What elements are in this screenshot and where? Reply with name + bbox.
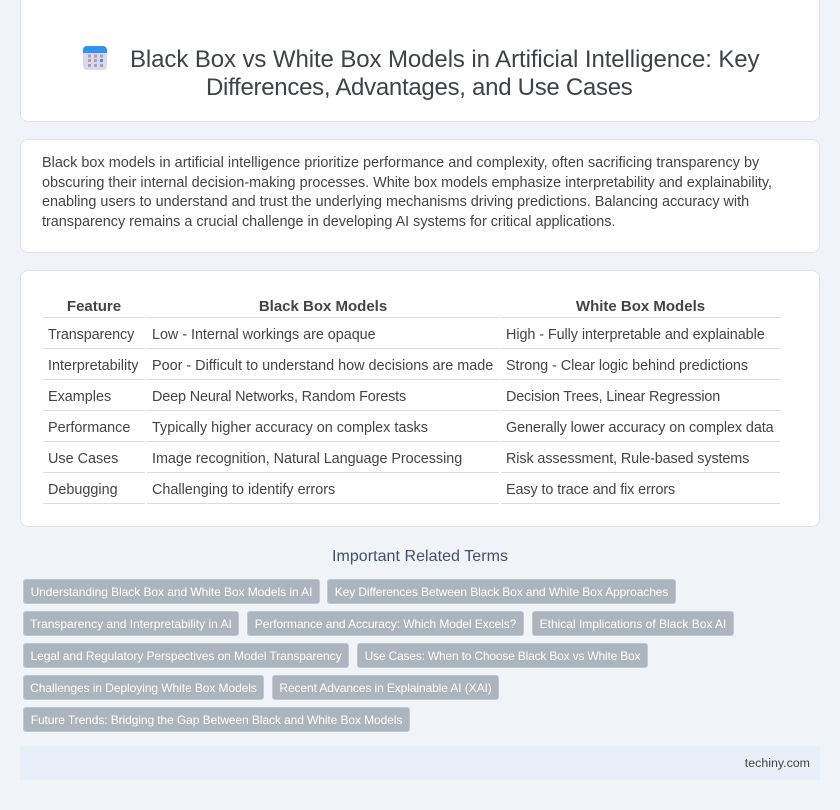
tag: Future Trends: Bridging the Gap Between Black and White Box Models <box>31 713 402 727</box>
tag <box>272 675 499 700</box>
row: examples: Decision Trees, Linear Regression <box>506 389 720 405</box>
row: examples <box>48 389 720 405</box>
summary text: obscuring their internal decision-making processes. White box models emphasize interpretability and explainability, <box>42 175 772 191</box>
tag: Legal and Regulatory Perspectives on Model Transparency <box>30 649 342 663</box>
panel: comparison table card <box>20 270 820 527</box>
table header: White Box Models <box>576 298 705 315</box>
tag: Key Differences Between Black Box and White Box Approaches <box>335 585 668 599</box>
table header: Black Box Models <box>259 298 387 315</box>
tag: Performance and Accuracy: Which Model Excels? <box>255 617 516 631</box>
row: interpretability <box>48 358 748 374</box>
summary text: transparency remains a crucial challenge in developing AI systems for critical applications. <box>42 214 616 230</box>
row: examples: Deep Neural Networks, Random Forests <box>152 389 406 405</box>
row: debugging: Challenging to identify errors <box>152 482 335 498</box>
table header <box>67 298 705 315</box>
row: performance: Generally lower accuracy on complex data <box>506 420 774 436</box>
footer site name: techiny.com <box>745 756 810 770</box>
row: transparency: Transparency <box>48 327 134 343</box>
row: use cases <box>48 451 749 467</box>
related term tags <box>23 579 734 732</box>
row: transparency <box>48 327 765 343</box>
icon: calendar grid <box>83 46 107 70</box>
tag: Challenges in Deploying White Box Models <box>30 681 257 695</box>
row: debugging: Easy to trace and fix errors <box>506 482 675 498</box>
row: use cases: Risk assessment, Rule-based systems <box>506 451 749 467</box>
footer bar <box>20 746 820 780</box>
heading: related terms: Important Related Terms <box>332 548 508 565</box>
summary text <box>42 155 772 230</box>
tag <box>23 707 410 732</box>
tag: Transparency and Interpretability in AI <box>30 617 232 631</box>
row: use cases: Image recognition, Natural Language Processing <box>152 451 462 467</box>
tag: Ethical Implications of Black Box AI <box>540 617 726 631</box>
tag <box>23 579 320 604</box>
row: debugging <box>48 482 675 498</box>
row: use cases: Use Cases <box>48 451 118 467</box>
tag <box>23 611 239 636</box>
tag <box>532 611 734 636</box>
row: transparency: Low - Internal workings are opaque <box>152 327 376 343</box>
panel: title card <box>20 0 820 122</box>
row: interpretability: Interpretability <box>48 358 138 374</box>
tag <box>247 611 524 636</box>
title <box>130 46 760 101</box>
comparison table <box>43 298 780 504</box>
row: performance: Performance <box>48 420 130 436</box>
panel: summary card <box>20 139 820 253</box>
row: performance <box>48 420 774 436</box>
row: examples: Examples <box>48 389 111 405</box>
tag <box>357 643 648 668</box>
row: debugging: Debugging <box>48 482 118 498</box>
title: Differences, Advantages, and Use Cases <box>206 74 633 101</box>
title: Black Box vs White Box Models in Artificial Intelligence: Key <box>130 46 759 73</box>
tag: Use Cases: When to Choose Black Box vs White Box <box>365 649 640 663</box>
row: performance: Typically higher accuracy on complex tasks <box>152 420 428 436</box>
row: interpretability: Poor - Difficult to understand how decisions are made <box>152 358 493 374</box>
row: interpretability: Strong - Clear logic behind predictions <box>506 358 748 374</box>
table header: Feature <box>67 298 121 315</box>
row: transparency: High - Fully interpretable and explainable <box>506 327 765 343</box>
tag <box>23 643 349 668</box>
tag: Recent Advances in Explainable AI (XAI) <box>279 681 492 695</box>
summary text: Black box models in artificial intelligence prioritize performance and complexity, often sacrificing transparency by <box>42 155 759 171</box>
tag <box>23 675 264 700</box>
tag <box>327 579 676 604</box>
summary text: enabling users to understand and trust the underlying mechanisms driving predictions. Balancing accuracy with <box>42 194 749 210</box>
tag: Understanding Black Box and White Box Models in AI <box>31 585 312 599</box>
